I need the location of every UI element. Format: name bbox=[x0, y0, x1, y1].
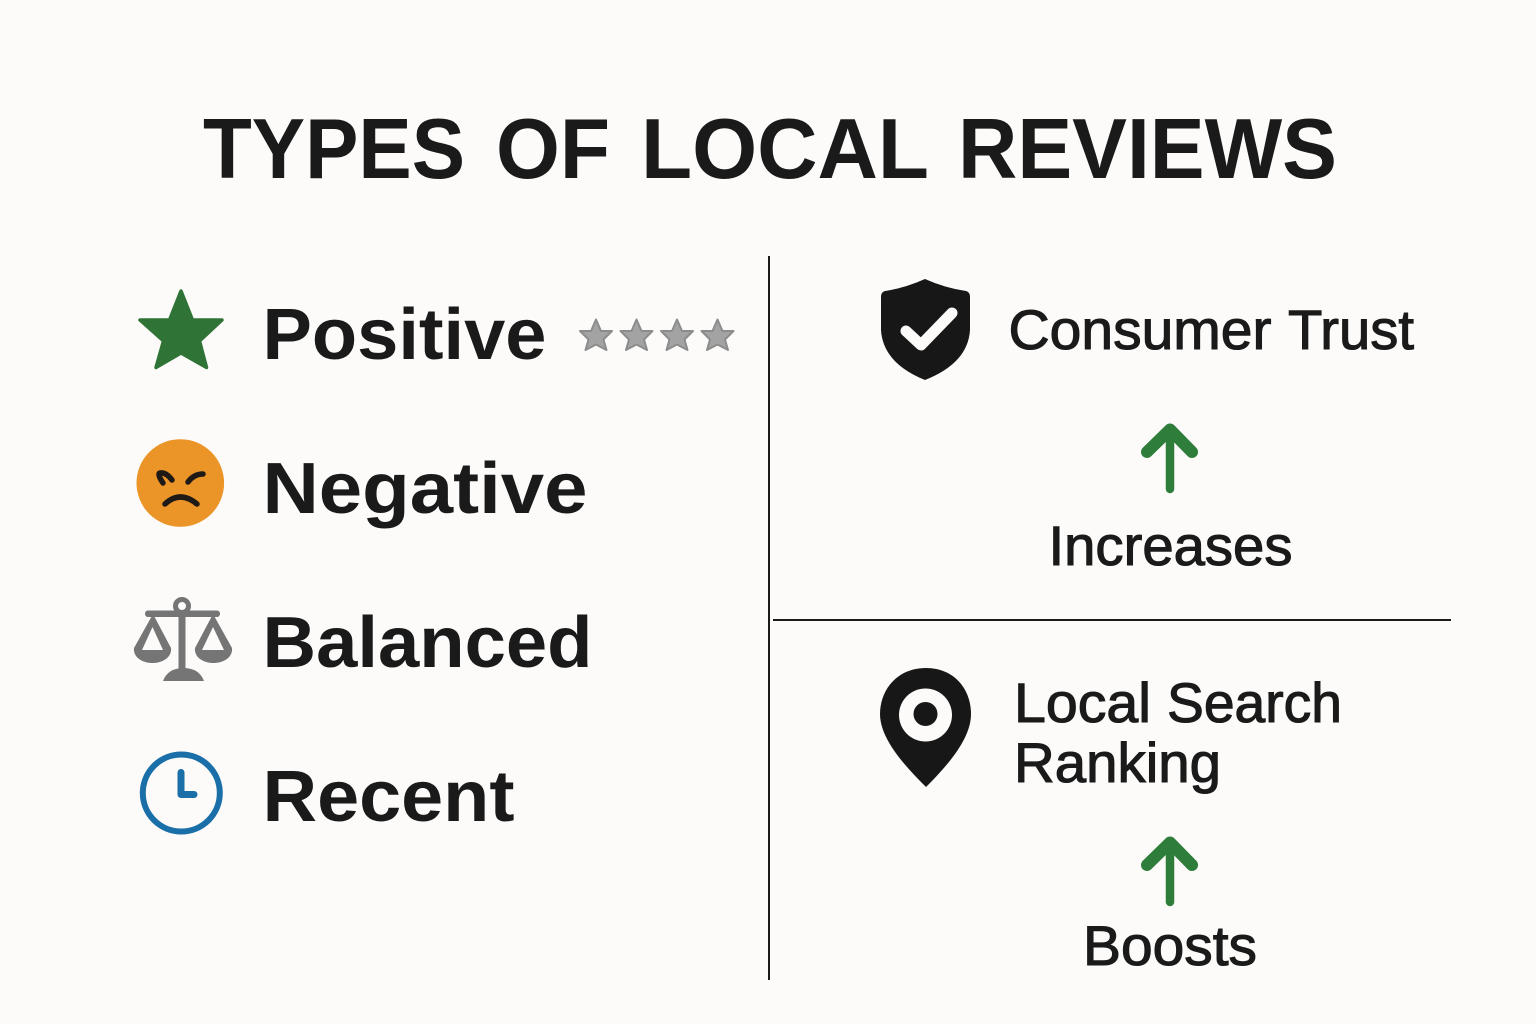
arrow: up bbox=[1147, 430, 1192, 489]
panel: review types bbox=[134, 291, 734, 837]
label: consumer trust bbox=[1008, 298, 1414, 361]
arrow: up bbox=[1147, 842, 1192, 902]
title: TYPES bbox=[203, 102, 465, 197]
icon: angry face bbox=[136, 439, 224, 527]
label: local search ranking bbox=[1014, 671, 1342, 794]
icon: green star bbox=[140, 291, 222, 368]
label: local search ranking: Ranking bbox=[1014, 731, 1221, 794]
label: balanced: Balanced bbox=[262, 603, 592, 683]
title bbox=[203, 102, 1337, 197]
label: local search ranking: Local bbox=[1014, 671, 1151, 734]
panel: consumer trust bbox=[881, 279, 1414, 577]
panel: local search ranking bbox=[880, 668, 1342, 977]
label: recent: Recent bbox=[262, 757, 515, 837]
title: LOCAL bbox=[641, 102, 929, 197]
icon: shield with check bbox=[881, 279, 970, 380]
title: OF bbox=[496, 102, 610, 197]
icon: four grey rating stars bbox=[580, 320, 734, 350]
label: consumer trust: Trust bbox=[1288, 298, 1414, 361]
icon: clock bbox=[143, 754, 220, 832]
label: consumer trust: Consumer bbox=[1008, 298, 1272, 361]
label: boosts: Boosts bbox=[1083, 914, 1257, 977]
title: REVIEWS bbox=[958, 102, 1337, 197]
label: increases: Increases bbox=[1048, 514, 1292, 577]
label: local search ranking: Search bbox=[1167, 671, 1342, 734]
icon: location pin bbox=[880, 668, 971, 787]
icon: balance scales bbox=[134, 600, 232, 681]
label: negative: Negative bbox=[262, 449, 588, 529]
label: positive: Positive bbox=[262, 295, 546, 375]
